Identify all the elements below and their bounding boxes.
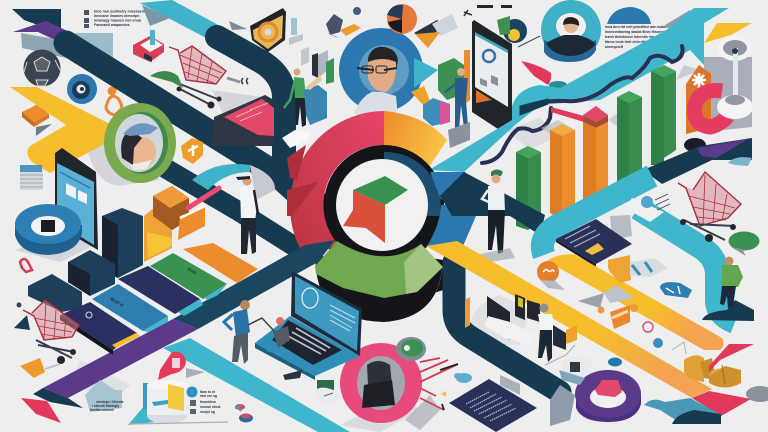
green ring with face portrait: [104, 103, 176, 183]
shield phone icon: [250, 8, 286, 52]
red diamond: [21, 398, 61, 423]
bottom dark document card: [449, 375, 537, 432]
chart shadows: [541, 65, 700, 140]
isometric tile row: Bon u: [109, 296, 124, 308]
orange box stack: [144, 186, 219, 262]
orange arc: [384, 111, 447, 170]
pink streak onto bar: [551, 107, 584, 122]
server blocks: [301, 47, 334, 84]
cyan band lower: [163, 338, 350, 432]
grey block in cyan band: [610, 215, 632, 240]
icon: green and grey tube: [314, 380, 340, 407]
dark navy main band left: [66, 43, 300, 195]
blue dome and text block: Innmnmfareing dakiat llinm tfinorroapnt: [605, 30, 672, 34]
person: right of donut: [480, 170, 515, 262]
pink badge icon: [158, 352, 205, 380]
small machine icon top: [326, 7, 361, 38]
green circle icon: [396, 337, 426, 361]
shopping cart right: [678, 172, 741, 242]
cyan band descending right: [638, 208, 735, 322]
yellow chevron arrow: [10, 87, 112, 173]
blue dome and text block: Inna dnn tirt nefi ptrictlitve adn maktin: [605, 25, 669, 29]
red arc: [290, 111, 384, 263]
person: white shirt center left: [236, 176, 258, 254]
icon: blue puzzle: [454, 373, 472, 383]
icon: stacked document: [20, 165, 43, 190]
cart lower left: [14, 300, 79, 364]
icon: orange block: [22, 104, 52, 136]
person: green top: [282, 68, 327, 148]
person at desk workstation: [465, 294, 577, 365]
small pedestal and text block bottom left: ninntopn i lltinnite: [96, 400, 124, 404]
dark navy band lower right: [454, 262, 560, 392]
purple ring: [550, 370, 641, 426]
goblet pedestal: [717, 35, 753, 119]
dark wave line: [482, 46, 683, 163]
person: woman in blue with shapes: [411, 50, 470, 148]
cyan band top: [140, 0, 222, 38]
isometric tile row: Ann: [186, 266, 197, 276]
cyan swoosh: [192, 164, 275, 200]
top portrait blue ring: [339, 28, 438, 118]
green blob behind cart: [150, 71, 183, 88]
icon: cylinder chart with text: [128, 380, 228, 425]
person: green right with dark base: [702, 256, 754, 321]
orange cart icon and small symbols: [578, 285, 686, 354]
text block: top left legend: Inno non outlinetry misseaein: [94, 10, 145, 14]
text block: top left legend: [84, 10, 145, 28]
cyan band right of chart: [542, 176, 652, 255]
small connector icon: [227, 78, 248, 84]
dark band bottom right blob: [644, 386, 768, 424]
icon: cylinder chart with text: tinanldnm: [200, 400, 216, 404]
bar chart: isometric bars: [516, 65, 676, 230]
coins and red flags: [684, 344, 754, 416]
smartphone top center: [472, 20, 512, 129]
blue dome and text block: tranit thrkdicnnn intnrnlin niner kt ntnit: [605, 35, 671, 39]
black ring: [324, 145, 444, 265]
icon: orange tag: [20, 358, 60, 378]
blue dome and text block: titnnc innie tlnrt einin Nbt: [605, 40, 648, 44]
center donut chart: [287, 111, 477, 322]
small pedestal and text block bottom left: tinnitin nnnmnh: [90, 408, 114, 412]
green speech bubble: [728, 232, 760, 256]
cyan ring portrait top right: [541, 0, 601, 62]
blue dome and text block: onmnpnctf: [605, 45, 624, 49]
dark navy band short: [165, 168, 300, 250]
icon: gauge cylinder small: [559, 356, 622, 385]
blue dome and text block: [605, 7, 690, 49]
yellow band upper: [547, 254, 724, 350]
icon: cylinder chart with text: tban to nt: [200, 390, 216, 394]
icon: cylinder chart with text: nnnnal nlnnk: [200, 405, 221, 409]
smartphone left: [55, 148, 98, 250]
icon: blue eye circle: [67, 74, 97, 104]
stair blocks: [28, 208, 143, 312]
yellow flag: [704, 23, 752, 43]
dark navy band top right: [217, 37, 284, 170]
person: seated on laptop: [258, 317, 302, 380]
small pedestal and text block bottom left: [85, 380, 124, 412]
header flag: dark and purple: [12, 9, 113, 80]
dark connector right of donut: [440, 172, 545, 235]
orange badge: [537, 261, 565, 290]
small card icon: [625, 194, 670, 222]
center cube icon: [353, 176, 408, 205]
pink ring portrait: [340, 343, 458, 430]
icon: orange gear badge: [181, 138, 203, 164]
laptop: [255, 271, 362, 380]
icon: orange person: [106, 88, 122, 115]
dark blue ring right: [384, 152, 441, 216]
screen card red: [212, 95, 274, 146]
person: standing blue shirt: [224, 300, 275, 364]
icon: red scribble: [20, 259, 32, 272]
small pedestal and text block bottom left: i ntinrnit ittintngty: [92, 404, 119, 408]
small circles bottom: [235, 404, 253, 422]
text block: top left legend: Inmnane linanies mmorlpn: [94, 14, 140, 18]
yellow band lower: [426, 241, 712, 398]
text block: top left legend: meanagy maanes non enua: [94, 18, 142, 22]
white hole: [336, 159, 428, 251]
icons top center: pie and tablet: [387, 4, 512, 48]
cyan big arrow: [429, 8, 729, 172]
icon: cube red and teal: [133, 30, 164, 62]
green sector: [315, 241, 443, 298]
letter C with flower badge: [686, 65, 728, 134]
text block: top left legend: Fanmanil maqancins: [94, 23, 130, 27]
shopping cart top: [169, 46, 226, 108]
red leaf: [521, 61, 567, 89]
blue lower ring: [427, 205, 477, 246]
dark code card: [556, 219, 632, 267]
dark and purple diagonal ribbon: [33, 240, 335, 408]
icon: donut yellow and green: [497, 16, 540, 47]
dark band right with purple tip: [643, 138, 752, 184]
isometric tile row: [60, 243, 258, 355]
orange cylinders and swirl icons: [608, 255, 692, 298]
triangle marker and small server icons: [229, 18, 303, 45]
isometric tile row: Ston: [143, 278, 156, 289]
black shadow body: [316, 250, 443, 322]
icon: cylinder chart with text: ntnl nnl ng: [200, 394, 217, 398]
blue ring left: [15, 204, 82, 255]
soccer ball icon: [24, 50, 60, 86]
icon: cylinder chart with text: nnnjnl ng: [200, 410, 215, 414]
